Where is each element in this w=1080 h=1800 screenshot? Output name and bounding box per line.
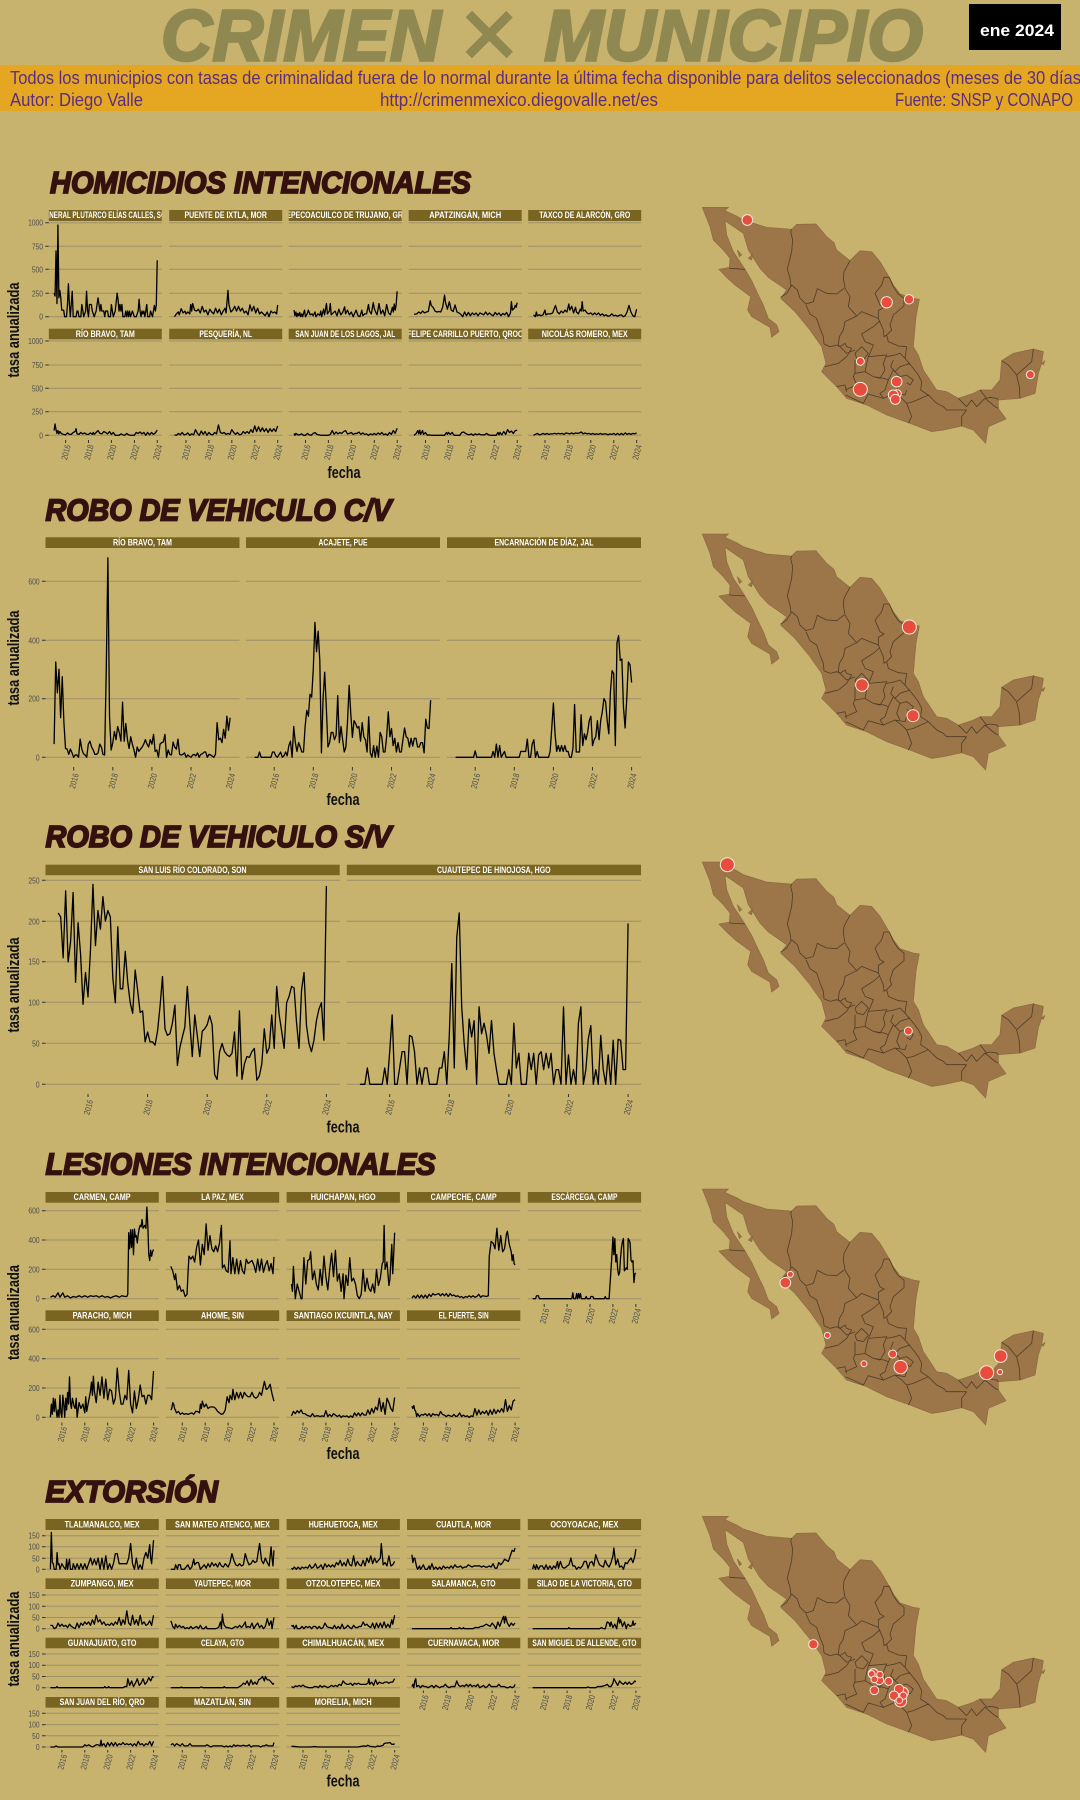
panel: Río Bravo: 2022 xyxy=(128,444,142,461)
panel: Silao de la Victoria xyxy=(528,1578,641,1629)
panel: Felipe Carrillo Puerto: 2018 xyxy=(442,444,456,461)
heading: HOMICIDIOS INTENCIONALES xyxy=(50,165,471,200)
panel: San Miguel de Allende: 2022 xyxy=(607,1694,620,1711)
panel: Santiago Ixcuintla: 2020 xyxy=(343,1425,356,1443)
panel: Taxco de Alarcón xyxy=(528,209,641,317)
panel: Cuernavaca xyxy=(407,1638,523,1711)
panel: San Juan de los Lagos: 2018 xyxy=(322,444,336,461)
panel: Morelia: 2022 xyxy=(365,1753,379,1771)
heading: EXTORSIÓN xyxy=(46,1474,219,1509)
panel: San Juan de los Lagos: 2024 xyxy=(391,443,405,461)
x axis title: fecha xyxy=(326,1118,360,1137)
panel: Río Bravo: 2018 xyxy=(82,444,96,461)
panel: Escárcega: 2018 xyxy=(561,1307,574,1325)
panel: Paracho: 2024 xyxy=(147,1425,161,1443)
panel: Río Bravo: 2016 xyxy=(59,444,73,461)
panel: El Fuerte xyxy=(407,1310,523,1443)
panel: Cuautepec de Hinojosa: 2020 xyxy=(503,1098,516,1116)
panel: Carmen: 400 xyxy=(28,1235,40,1245)
panel: Tlalmanalco: 0 xyxy=(36,1564,40,1575)
subtitle band: http://crimenmexico.diegovalle.net/es xyxy=(380,90,658,110)
panel: Morelia: 2018 xyxy=(320,1753,333,1771)
panel: Mazatlán: 2024 xyxy=(268,1753,281,1771)
panel: Pesquería: 2016 xyxy=(180,444,193,461)
section: lesiones intencionales xyxy=(4,1147,1045,1463)
panel: Tepecoacuilco de Trujano xyxy=(282,210,408,317)
panel: Río Bravo: 2018 xyxy=(107,772,120,790)
panel: Zumpango: 0 xyxy=(36,1624,40,1634)
panel: San Miguel de Allende: 2020 xyxy=(584,1693,597,1711)
panel: General Plutarco Elías Calles xyxy=(28,210,170,322)
panel: Cuernavaca: 2018 xyxy=(440,1694,454,1711)
panel: Río Bravo: 0 xyxy=(39,430,43,441)
panel: Acajete xyxy=(246,537,440,790)
section: extorsión xyxy=(4,1474,1045,1791)
panel: Cuernavaca: 2016 xyxy=(417,1694,431,1711)
panel: Huehuetoca xyxy=(287,1519,400,1569)
panel: Felipe Carrillo Puerto: 2016 xyxy=(419,444,433,461)
date badge xyxy=(969,4,1061,50)
panel: San Juan de los Lagos: 2016 xyxy=(299,444,313,461)
panel: Morelia xyxy=(287,1697,402,1771)
panel: Nicolás Romero: 2020 xyxy=(585,443,598,461)
panel: Río Bravo: 2024 xyxy=(151,443,165,461)
panel: Mazatlán: 2016 xyxy=(176,1753,190,1771)
panel: General Plutarco Elías Calles: 250 xyxy=(32,288,43,299)
panel: Felipe Carrillo Puerto: 2024 xyxy=(511,443,525,461)
panel: Encarnación de Díaz: 2016 xyxy=(469,772,483,790)
panel: Guanajuato: 100 xyxy=(28,1660,40,1670)
panel: Paracho: 400 xyxy=(28,1354,40,1364)
panel: General Plutarco Elías Calles: 1000 xyxy=(28,218,43,228)
panel: San Luis Río Colorado: 200 xyxy=(28,916,40,927)
title xyxy=(161,0,923,90)
panel: Río Bravo: 600 xyxy=(28,576,40,587)
x axis title: fecha xyxy=(326,790,360,809)
panel: Acajete: 2016 xyxy=(268,772,282,790)
panel: Río Bravo: 2024 xyxy=(224,772,238,790)
panel: Santiago Ixcuintla: 2016 xyxy=(297,1426,310,1443)
panel: Morelia: 2016 xyxy=(297,1753,310,1771)
panel: San Luis Río Colorado: 2018 xyxy=(141,1099,155,1116)
panel: San Luis Río Colorado: 100 xyxy=(28,997,40,1008)
panel: Ahome: 2022 xyxy=(245,1426,258,1443)
panel: Zumpango: 50 xyxy=(32,1613,40,1623)
panel: General Plutarco Elías Calles: 750 xyxy=(32,241,43,252)
panel: Guanajuato xyxy=(28,1638,159,1693)
panel: Escárcega: 2024 xyxy=(630,1307,643,1325)
panel: Morelia: 2020 xyxy=(343,1753,356,1771)
panel: El Fuerte: 2022 xyxy=(486,1426,499,1443)
section: robo de vehiculo c/v xyxy=(4,493,1045,809)
panel: Guanajuato: 150 xyxy=(28,1649,40,1659)
panel: Río Bravo: 2016 xyxy=(67,772,81,790)
map: robo sin violencia xyxy=(702,858,1045,1098)
panel: San Juan de los Lagos: 2020 xyxy=(345,443,359,461)
panel: Encarnación de Díaz: 2018 xyxy=(508,772,522,790)
panel: Mazatlán: 2020 xyxy=(222,1753,236,1771)
panel: El Fuerte: 2018 xyxy=(440,1426,454,1443)
panel: San Luis Río Colorado: 0 xyxy=(36,1079,40,1090)
panel: San Luis Río Colorado: 2020 xyxy=(201,1098,215,1116)
panel: El Fuerte: 2020 xyxy=(463,1425,477,1443)
panel: Mazatlán: 2018 xyxy=(199,1753,213,1771)
panel: Puente de Ixtla xyxy=(169,210,282,317)
panel: General Plutarco Elías Calles: 500 xyxy=(32,264,43,275)
panel: Escárcega: 2016 xyxy=(538,1307,552,1325)
panel: Chimalhuacán xyxy=(287,1638,400,1688)
panel: Yautepec xyxy=(166,1578,279,1629)
panel: Paracho: 200 xyxy=(28,1383,40,1393)
panel: San Miguel de Allende xyxy=(528,1638,643,1711)
x axis title: fecha xyxy=(326,1444,360,1463)
panel: Zumpango: 100 xyxy=(28,1601,40,1612)
panel: Tlalmanalco xyxy=(28,1519,159,1575)
section: homicidios intencionales xyxy=(4,165,1045,482)
panel: Río Bravo: 2022 xyxy=(185,772,198,790)
panel: Río Bravo: 2020 xyxy=(105,443,119,461)
panel: Morelia: 2024 xyxy=(388,1753,402,1771)
panel: San Juan del Río: 2018 xyxy=(79,1753,92,1771)
panel: Guanajuato: 50 xyxy=(32,1672,40,1682)
panel: Santiago Ixcuintla: 2024 xyxy=(388,1425,402,1443)
panel: Santiago Ixcuintla: 2018 xyxy=(320,1426,333,1443)
panel: General Plutarco Elías Calles: 0 xyxy=(39,312,43,322)
panel: Cuautepec de Hinojosa: 2016 xyxy=(383,1099,397,1116)
x axis title: fecha xyxy=(328,463,361,482)
y axis title: tasa anualizada xyxy=(4,937,23,1032)
panel: Cuautepec de Hinojosa: 2022 xyxy=(562,1099,576,1116)
panel: Santiago Ixcuintla xyxy=(287,1310,402,1443)
panel: Cuernavaca: 2020 xyxy=(463,1693,477,1711)
panel: Río Bravo: 2020 xyxy=(146,772,159,790)
panel: San Miguel de Allende: 2024 xyxy=(630,1693,643,1711)
panel: Paracho: 2020 xyxy=(101,1425,115,1443)
panel: Carmen: 600 xyxy=(28,1206,40,1216)
panel: Acajete: 2020 xyxy=(346,772,360,790)
panel: Salamanca xyxy=(407,1578,520,1629)
panel: San Luis Río Colorado: 150 xyxy=(28,957,40,967)
y axis title: tasa anualizada xyxy=(4,1591,23,1686)
panel: Pesquería: 2024 xyxy=(271,443,285,461)
panel: Pesquería: 2018 xyxy=(203,444,216,461)
panel: San Luis Río Colorado xyxy=(28,865,340,1116)
panel: Tlalmanalco: 50 xyxy=(32,1553,40,1564)
y axis title: tasa anualizada xyxy=(4,610,23,706)
panel: San Juan del Río: 100 xyxy=(28,1720,40,1730)
panel: Pesquería xyxy=(169,329,285,461)
panel: Mazatlán xyxy=(166,1697,281,1771)
panel: San Juan del Río: 150 xyxy=(28,1708,40,1719)
panel: Encarnación de Díaz xyxy=(447,536,641,790)
panel: Paracho: 2022 xyxy=(124,1426,138,1443)
map: lesiones xyxy=(702,1189,1045,1425)
map: extorsión xyxy=(702,1516,1045,1752)
panel: Cuernavaca: 2022 xyxy=(486,1694,499,1711)
panel: Río Bravo: 400 xyxy=(28,635,40,646)
panel: Río Bravo: 500 xyxy=(32,383,43,394)
panel: Río Bravo: 0 xyxy=(36,752,40,763)
subtitle band xyxy=(0,65,1080,111)
panel: Nicolás Romero xyxy=(528,329,644,461)
panel: Santiago Ixcuintla: 2022 xyxy=(365,1426,379,1443)
panel: Nicolás Romero: 2016 xyxy=(539,444,552,461)
panel: San Juan del Río: 2016 xyxy=(56,1753,69,1771)
panel: San Juan de los Lagos: 2022 xyxy=(368,444,382,461)
panel: Zumpango xyxy=(28,1578,159,1634)
panel: Cuernavaca: 2024 xyxy=(509,1693,523,1711)
panel: Encarnación de Díaz: 2020 xyxy=(547,772,561,790)
panel: San Miguel de Allende: 2016 xyxy=(538,1694,552,1711)
panel: El Fuerte: 2024 xyxy=(509,1425,523,1443)
panel: San Luis Río Colorado: 2024 xyxy=(320,1098,334,1116)
panel: Ahome: 2024 xyxy=(268,1425,281,1443)
panel: San Miguel de Allende: 2018 xyxy=(561,1694,574,1711)
heading: LESIONES INTENCIONALES xyxy=(46,1147,436,1182)
panel: Ocoyoacac xyxy=(528,1519,641,1569)
panel: Huichapan xyxy=(287,1192,400,1299)
panel: San Luis Río Colorado: 250 xyxy=(28,875,40,886)
panel: Encarnación de Díaz: 2022 xyxy=(586,772,600,790)
panel: Escárcega xyxy=(528,1192,643,1325)
panel: Cuautepec de Hinojosa: 2024 xyxy=(622,1098,636,1116)
panel: Paracho xyxy=(28,1310,161,1443)
panel: Río Bravo xyxy=(28,329,165,461)
panel: Río Bravo: 1000 xyxy=(28,336,43,346)
panel: San Juan del Río xyxy=(28,1697,161,1771)
heading: ROBO DE VEHICULO S/V xyxy=(46,819,394,854)
panel: Cuautepec de Hinojosa xyxy=(347,865,641,1116)
panel: San Juan del Río: 2024 xyxy=(147,1753,161,1771)
panel: Río Bravo xyxy=(28,537,239,790)
panel: La Paz xyxy=(166,1192,279,1299)
panel: Zumpango: 150 xyxy=(28,1590,40,1600)
panel: Campeche xyxy=(407,1192,520,1299)
panel: Nicolás Romero: 2022 xyxy=(608,444,621,461)
panel: Carmen xyxy=(28,1192,159,1304)
panel: Apatzingán xyxy=(409,210,522,317)
panel: Escárcega: 2022 xyxy=(607,1307,620,1325)
panel: San Juan del Río: 50 xyxy=(32,1731,40,1741)
panel: Paracho: 2018 xyxy=(79,1426,92,1443)
panel: Mazatlán: 2022 xyxy=(245,1753,258,1771)
panel: Acajete: 2018 xyxy=(307,772,321,790)
panel: Carmen: 0 xyxy=(36,1294,40,1304)
panel: Cuautepec de Hinojosa: 2018 xyxy=(443,1099,457,1116)
subtitle band: Autor: Diego Valle xyxy=(10,90,143,110)
panel: Río Bravo: 250 xyxy=(32,407,43,417)
panel: Felipe Carrillo Puerto xyxy=(407,329,525,461)
panel: Felipe Carrillo Puerto: 2020 xyxy=(465,443,479,461)
panel: Guanajuato: 0 xyxy=(36,1683,40,1693)
panel: Tlalmanalco: 100 xyxy=(28,1542,40,1552)
map: homicidios xyxy=(702,207,1045,443)
date badge: ene 2024 xyxy=(980,21,1055,40)
y axis title: tasa anualizada xyxy=(4,282,23,378)
panel: San Mateo Atenco xyxy=(166,1519,279,1569)
section: robo de vehiculo s/v xyxy=(4,819,1045,1137)
panel: Felipe Carrillo Puerto: 2022 xyxy=(488,444,502,461)
panel: Río Bravo: 200 xyxy=(28,694,40,704)
panel: Nicolás Romero: 2018 xyxy=(562,444,575,461)
panel: San Juan del Río: 2022 xyxy=(124,1753,138,1771)
panel: Cuautla xyxy=(407,1519,520,1569)
panel: San Juan de los Lagos xyxy=(289,329,405,461)
panel: Ahome: 2020 xyxy=(222,1425,236,1443)
panel: Acajete: 2022 xyxy=(385,772,399,790)
panel: Celaya xyxy=(166,1638,279,1688)
panel: Ahome: 2018 xyxy=(199,1426,213,1443)
panel: San Luis Río Colorado: 50 xyxy=(32,1038,40,1049)
panel: Paracho: 0 xyxy=(36,1412,40,1423)
panel: Pesquería: 2022 xyxy=(249,444,262,461)
panel: Nicolás Romero: 2024 xyxy=(630,443,644,461)
panel: Paracho: 600 xyxy=(28,1324,40,1335)
panel: Escárcega: 2020 xyxy=(584,1307,597,1325)
panel: Río Bravo: 750 xyxy=(32,360,43,370)
panel: Ahome: 2016 xyxy=(176,1426,190,1443)
panel: San Luis Río Colorado: 2016 xyxy=(82,1099,95,1116)
panel: Pesquería: 2020 xyxy=(226,443,239,461)
panel: San Juan del Río: 2020 xyxy=(101,1753,115,1771)
panel: Acajete: 2024 xyxy=(424,772,438,790)
panel: Encarnación de Díaz: 2024 xyxy=(625,772,639,790)
panel: San Luis Río Colorado: 2022 xyxy=(261,1099,274,1116)
panel: El Fuerte: 2016 xyxy=(417,1426,431,1443)
map: robo con violencia xyxy=(702,534,1045,770)
panel: Paracho: 2016 xyxy=(56,1426,69,1443)
panel: San Juan del Río: 0 xyxy=(36,1742,40,1752)
y axis title: tasa anualizada xyxy=(4,1265,23,1360)
panel: Otzolotepec xyxy=(287,1578,400,1629)
panel: Carmen: 200 xyxy=(28,1264,40,1275)
x axis title: fecha xyxy=(326,1772,360,1791)
panel: Ahome xyxy=(166,1310,281,1443)
heading: ROBO DE VEHICULO C/V xyxy=(46,493,394,528)
panel: Tlalmanalco: 150 xyxy=(28,1531,40,1541)
